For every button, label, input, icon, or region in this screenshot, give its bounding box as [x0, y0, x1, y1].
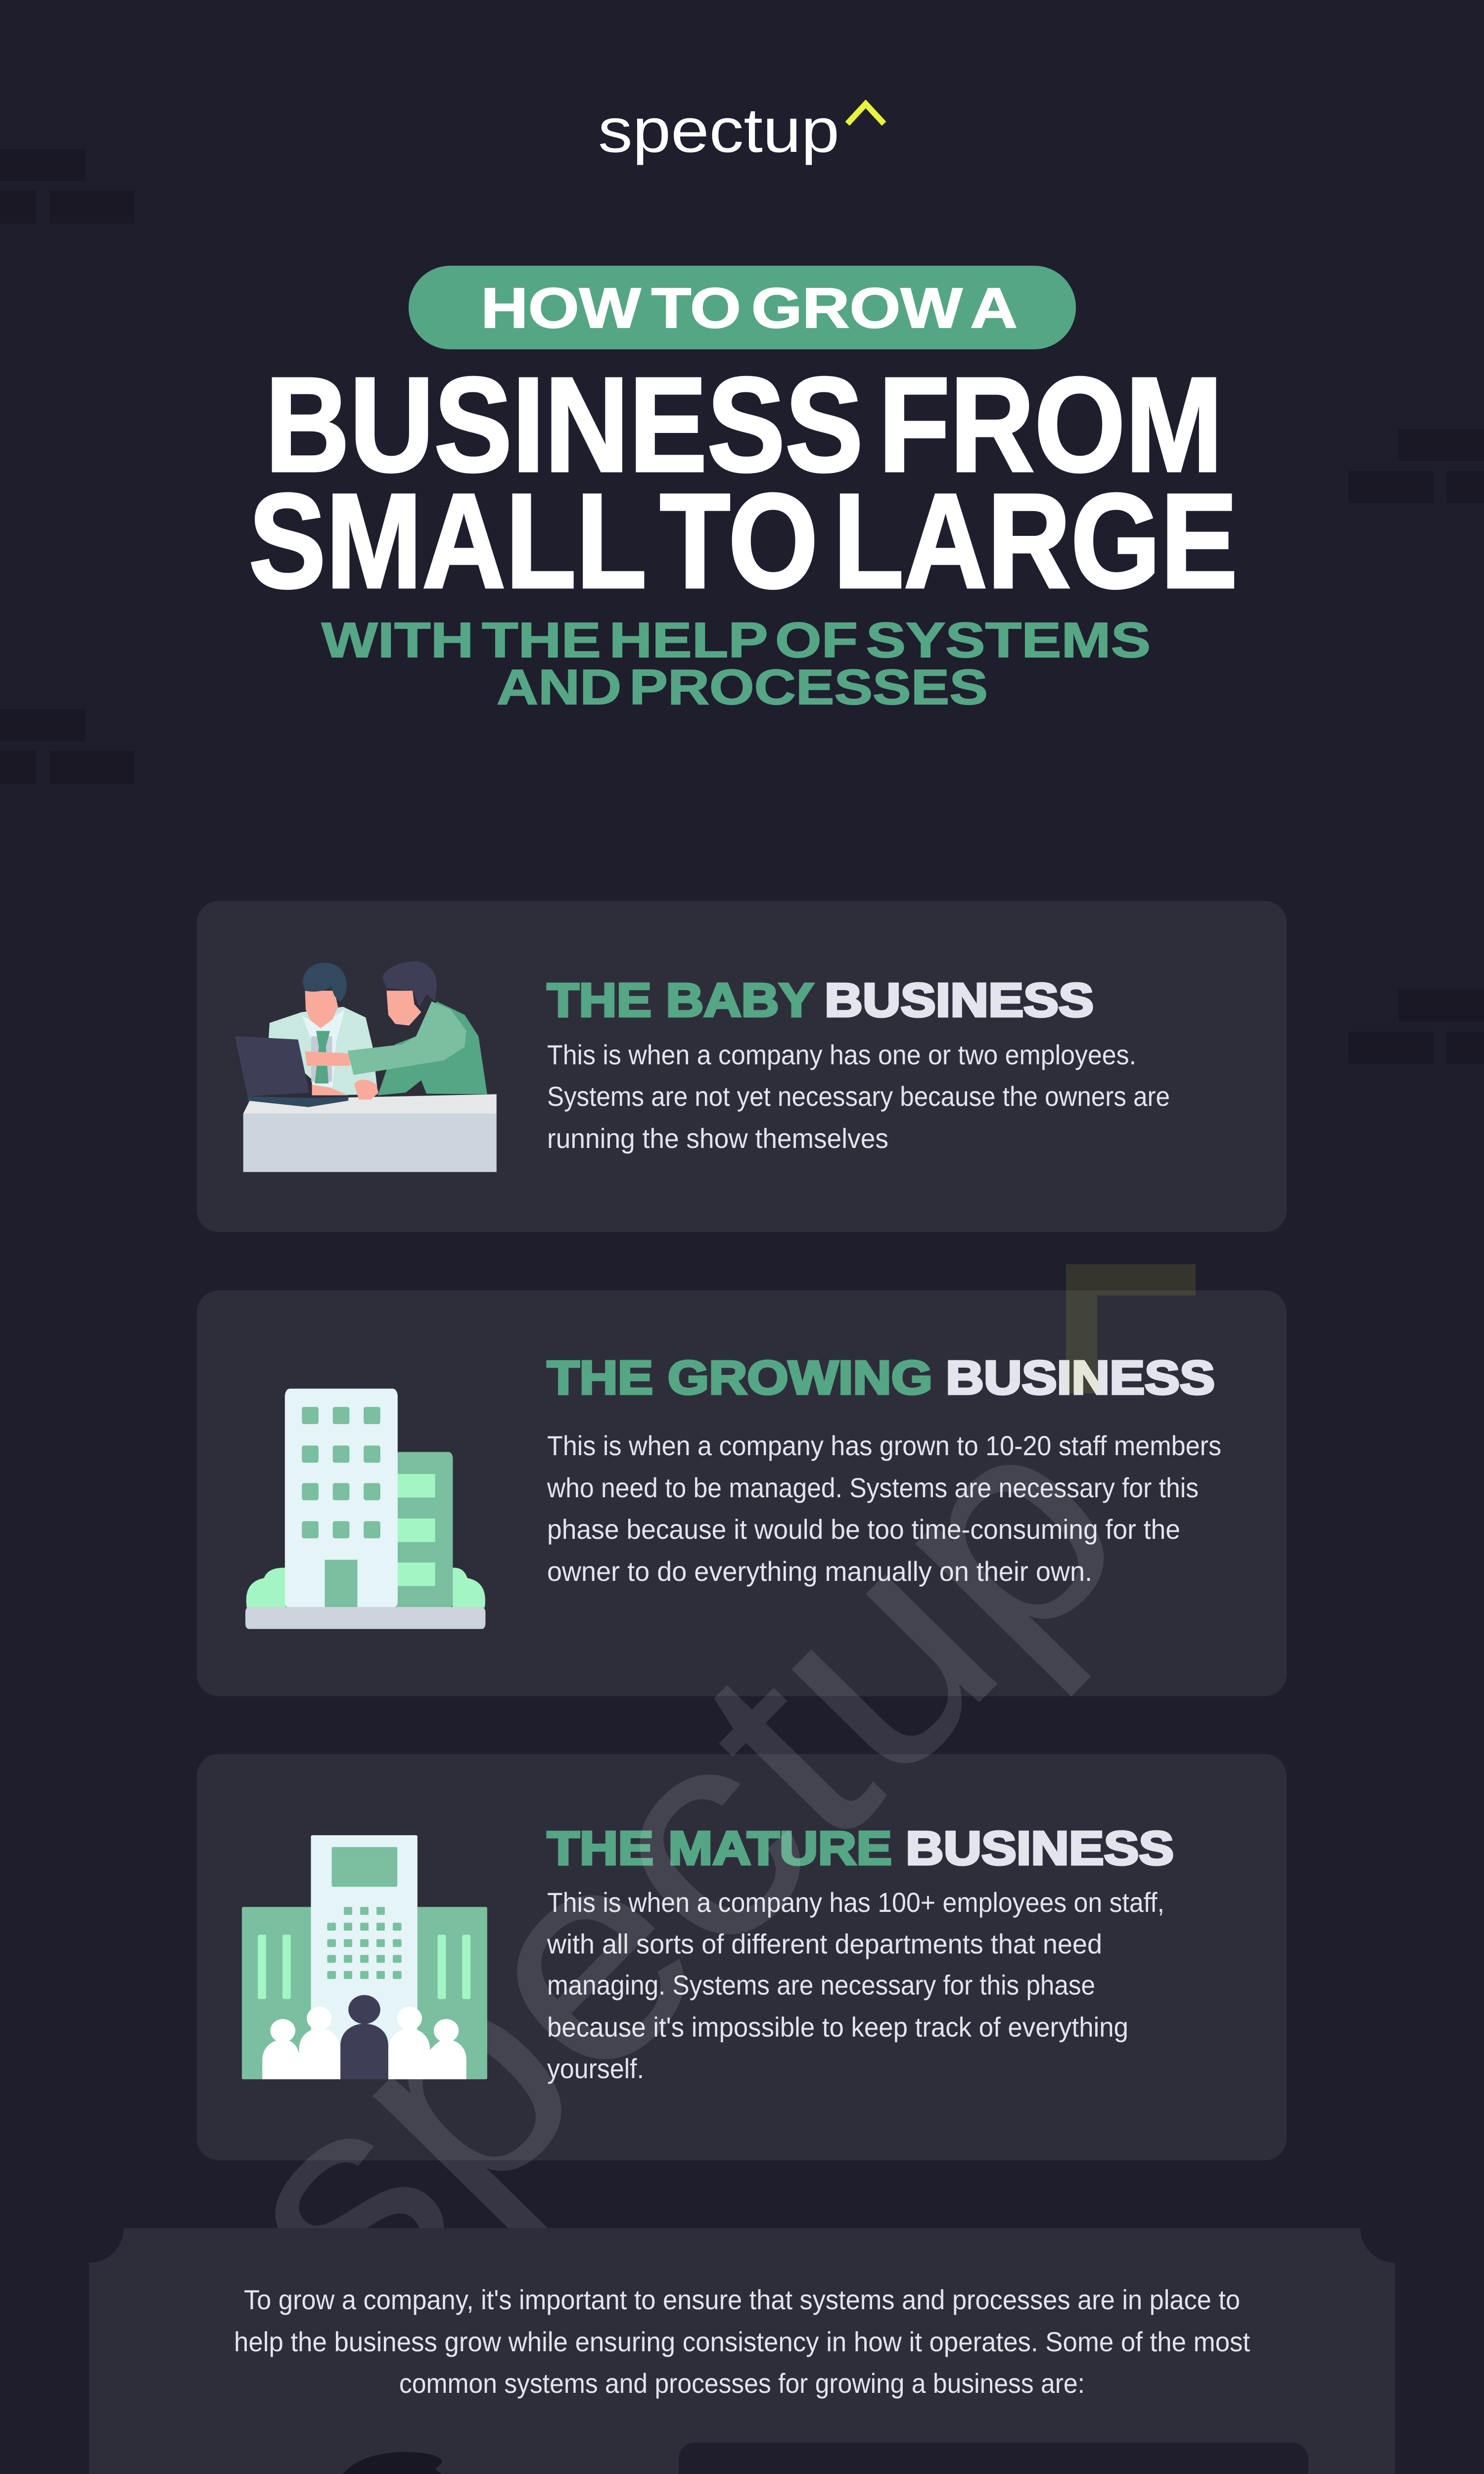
logo: spectup: spectup	[598, 95, 839, 165]
text: mature business description: managing. Systems are necessary for this phase	[547, 1969, 1095, 2000]
panel: list of processes	[679, 2443, 1308, 2474]
illustration: two people at a desk with laptop	[235, 961, 497, 1172]
text: mature business description: yourself.	[547, 2053, 644, 2084]
illustration: mature business tower with people	[242, 1835, 487, 2079]
text: systems intro paragraph: To grow a company, it's important to ensure that systems and processes are in place to	[244, 2284, 1240, 2315]
text: growing business description: who need to be managed. Systems are necessary for this	[547, 1472, 1199, 1503]
heading: the mature business	[547, 1822, 1174, 1875]
heading: the baby business: THE BABY	[547, 974, 814, 1027]
panel: the baby business	[197, 901, 1287, 1232]
text: growing business description: This is when a company has grown to 10-20 staff members	[547, 1430, 1221, 1461]
panel: the growing business	[197, 1290, 1287, 1696]
heading: the growing business	[547, 1351, 1215, 1404]
panel: systems and processes	[89, 2228, 1395, 2474]
text: systems intro paragraph: common systems and processes for growing a business are:	[399, 2368, 1085, 2399]
heading: the mature business: THE MATURE	[547, 1822, 892, 1875]
heading: the baby business: BUSINESS	[825, 974, 1094, 1027]
illustration: presenting man	[104, 2452, 695, 2474]
head	[329, 2452, 459, 2474]
text: baby business description: Systems are not yet necessary because the owners are	[547, 1081, 1170, 1112]
text: mature business description: This is when a company has 100+ employees on staff,	[547, 1887, 1164, 1918]
main title line 1: BUSINESS FROM	[265, 349, 1223, 500]
title pill	[409, 266, 1076, 349]
heading: the growing business: BUSINESS	[946, 1351, 1215, 1404]
text: mature business description: because it's impossible to keep track of everything	[547, 2011, 1128, 2043]
text: growing business description: phase because it would be too time-consuming for the	[547, 1514, 1180, 1545]
heading: the growing business: THE GROWING	[547, 1351, 932, 1404]
heading: the mature business: BUSINESS	[906, 1822, 1174, 1875]
title block	[249, 266, 1238, 715]
subtitle line 2: AND PROCESSES	[497, 660, 988, 715]
text: baby business description: This is when a company has one or two employees.	[547, 1039, 1136, 1070]
text: mature business description	[547, 1887, 1164, 2084]
main title line 2: SMALL TO LARGE	[249, 466, 1238, 616]
text: growing business description	[547, 1430, 1221, 1587]
illustration: growing business building	[245, 1389, 485, 1629]
text: baby business description: running the show themselves	[547, 1123, 888, 1154]
text: growing business description: owner to do everything manually on their own.	[547, 1556, 1092, 1587]
text: systems intro paragraph: help the business grow while ensuring consistency in how it operates. Some of the most	[234, 2326, 1250, 2357]
text: baby business description	[547, 1039, 1170, 1154]
text: systems intro paragraph	[234, 2284, 1250, 2399]
pill heading: HOW TO GROW A	[481, 277, 1018, 340]
panel: the mature business	[197, 1754, 1287, 2160]
text: mature business description: with all sorts of different departments that need	[547, 1928, 1102, 1959]
watermark: spectup: spectup	[168, 1355, 1182, 2379]
heading: the baby business	[547, 974, 1094, 1027]
subtitle line 1: WITH THE HELP OF SYSTEMS	[322, 613, 1151, 668]
